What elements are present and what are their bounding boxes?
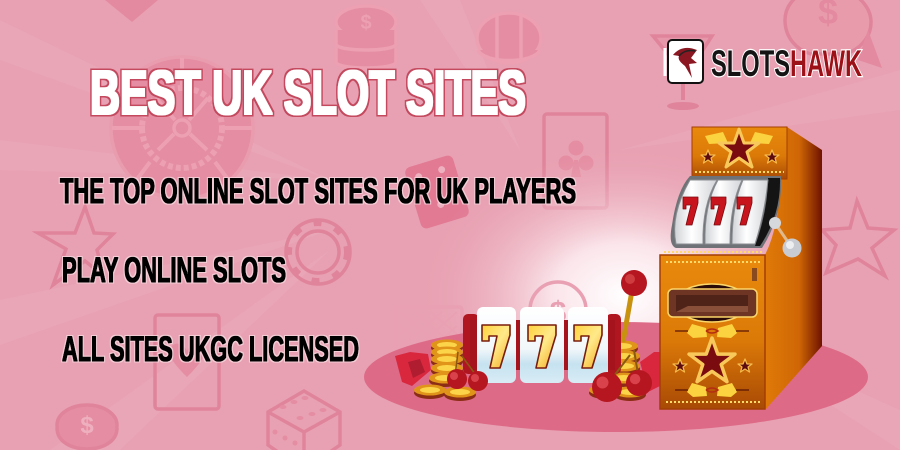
icon: lever: [621, 270, 647, 342]
background icon: dollar token and net card over glow: $: [550, 296, 567, 329]
icon: dollar coin left: [57, 405, 117, 449]
coin tray: [668, 284, 757, 322]
machine lever: [769, 217, 802, 258]
lower front panel: [660, 255, 765, 409]
icon: dollar bag top right: [785, 0, 882, 68]
icon: playing card club: [544, 114, 607, 208]
icon: heart top: [105, 0, 158, 22]
icon: martini glass: [653, 36, 712, 110]
subtitle line 1: THE TOP ONLINE SLOT SITES FOR UK PLAYERS: [60, 172, 576, 211]
icon: coin stack top: [336, 6, 396, 68]
icon: heart card: [155, 315, 219, 409]
icon: left gems: [395, 352, 431, 386]
large slot machine: [660, 127, 822, 409]
reels with sevens: [477, 307, 608, 383]
icon: right gems: [640, 352, 662, 392]
icon: dollar coin left: $: [80, 412, 94, 439]
centre glow: [380, 130, 830, 430]
background icon: dollar token and net card over glow: [395, 282, 586, 367]
title: BEST UK SLOT SITES: [90, 59, 526, 128]
ledge lights: [664, 251, 762, 253]
subtitle line 3: ALL SITES UKGC LICENSED: [62, 330, 359, 369]
icon: left coin stacks: [414, 340, 476, 401]
icon: hawk badge: [665, 40, 703, 83]
logo: [665, 40, 862, 84]
reel housing: [671, 176, 781, 248]
icon: right cherries: [592, 350, 652, 402]
icon: roulette wheel: [111, 57, 253, 199]
icon: outline star left: [38, 207, 113, 285]
icon: coin stack top: $: [360, 12, 372, 34]
cabinet side: [765, 127, 822, 409]
icon: poker chip: [286, 220, 350, 284]
logo: HAWK: [790, 43, 862, 84]
machine red body: [463, 314, 621, 374]
pink floor ellipse: [364, 322, 868, 432]
small slot machine: [395, 270, 662, 402]
icon: outline star right: [822, 201, 894, 276]
icon: white dice: [268, 391, 340, 450]
icon: red dice: [404, 154, 470, 230]
logo wordmark: SLOTS: [711, 43, 790, 84]
icon: chip stack: [477, 13, 541, 63]
top panel: [692, 127, 787, 179]
icon: right coin stacks: [589, 340, 646, 401]
subtitle line 2: PLAY ONLINE SLOTS: [62, 251, 286, 290]
icon: left cherries: [447, 352, 488, 391]
